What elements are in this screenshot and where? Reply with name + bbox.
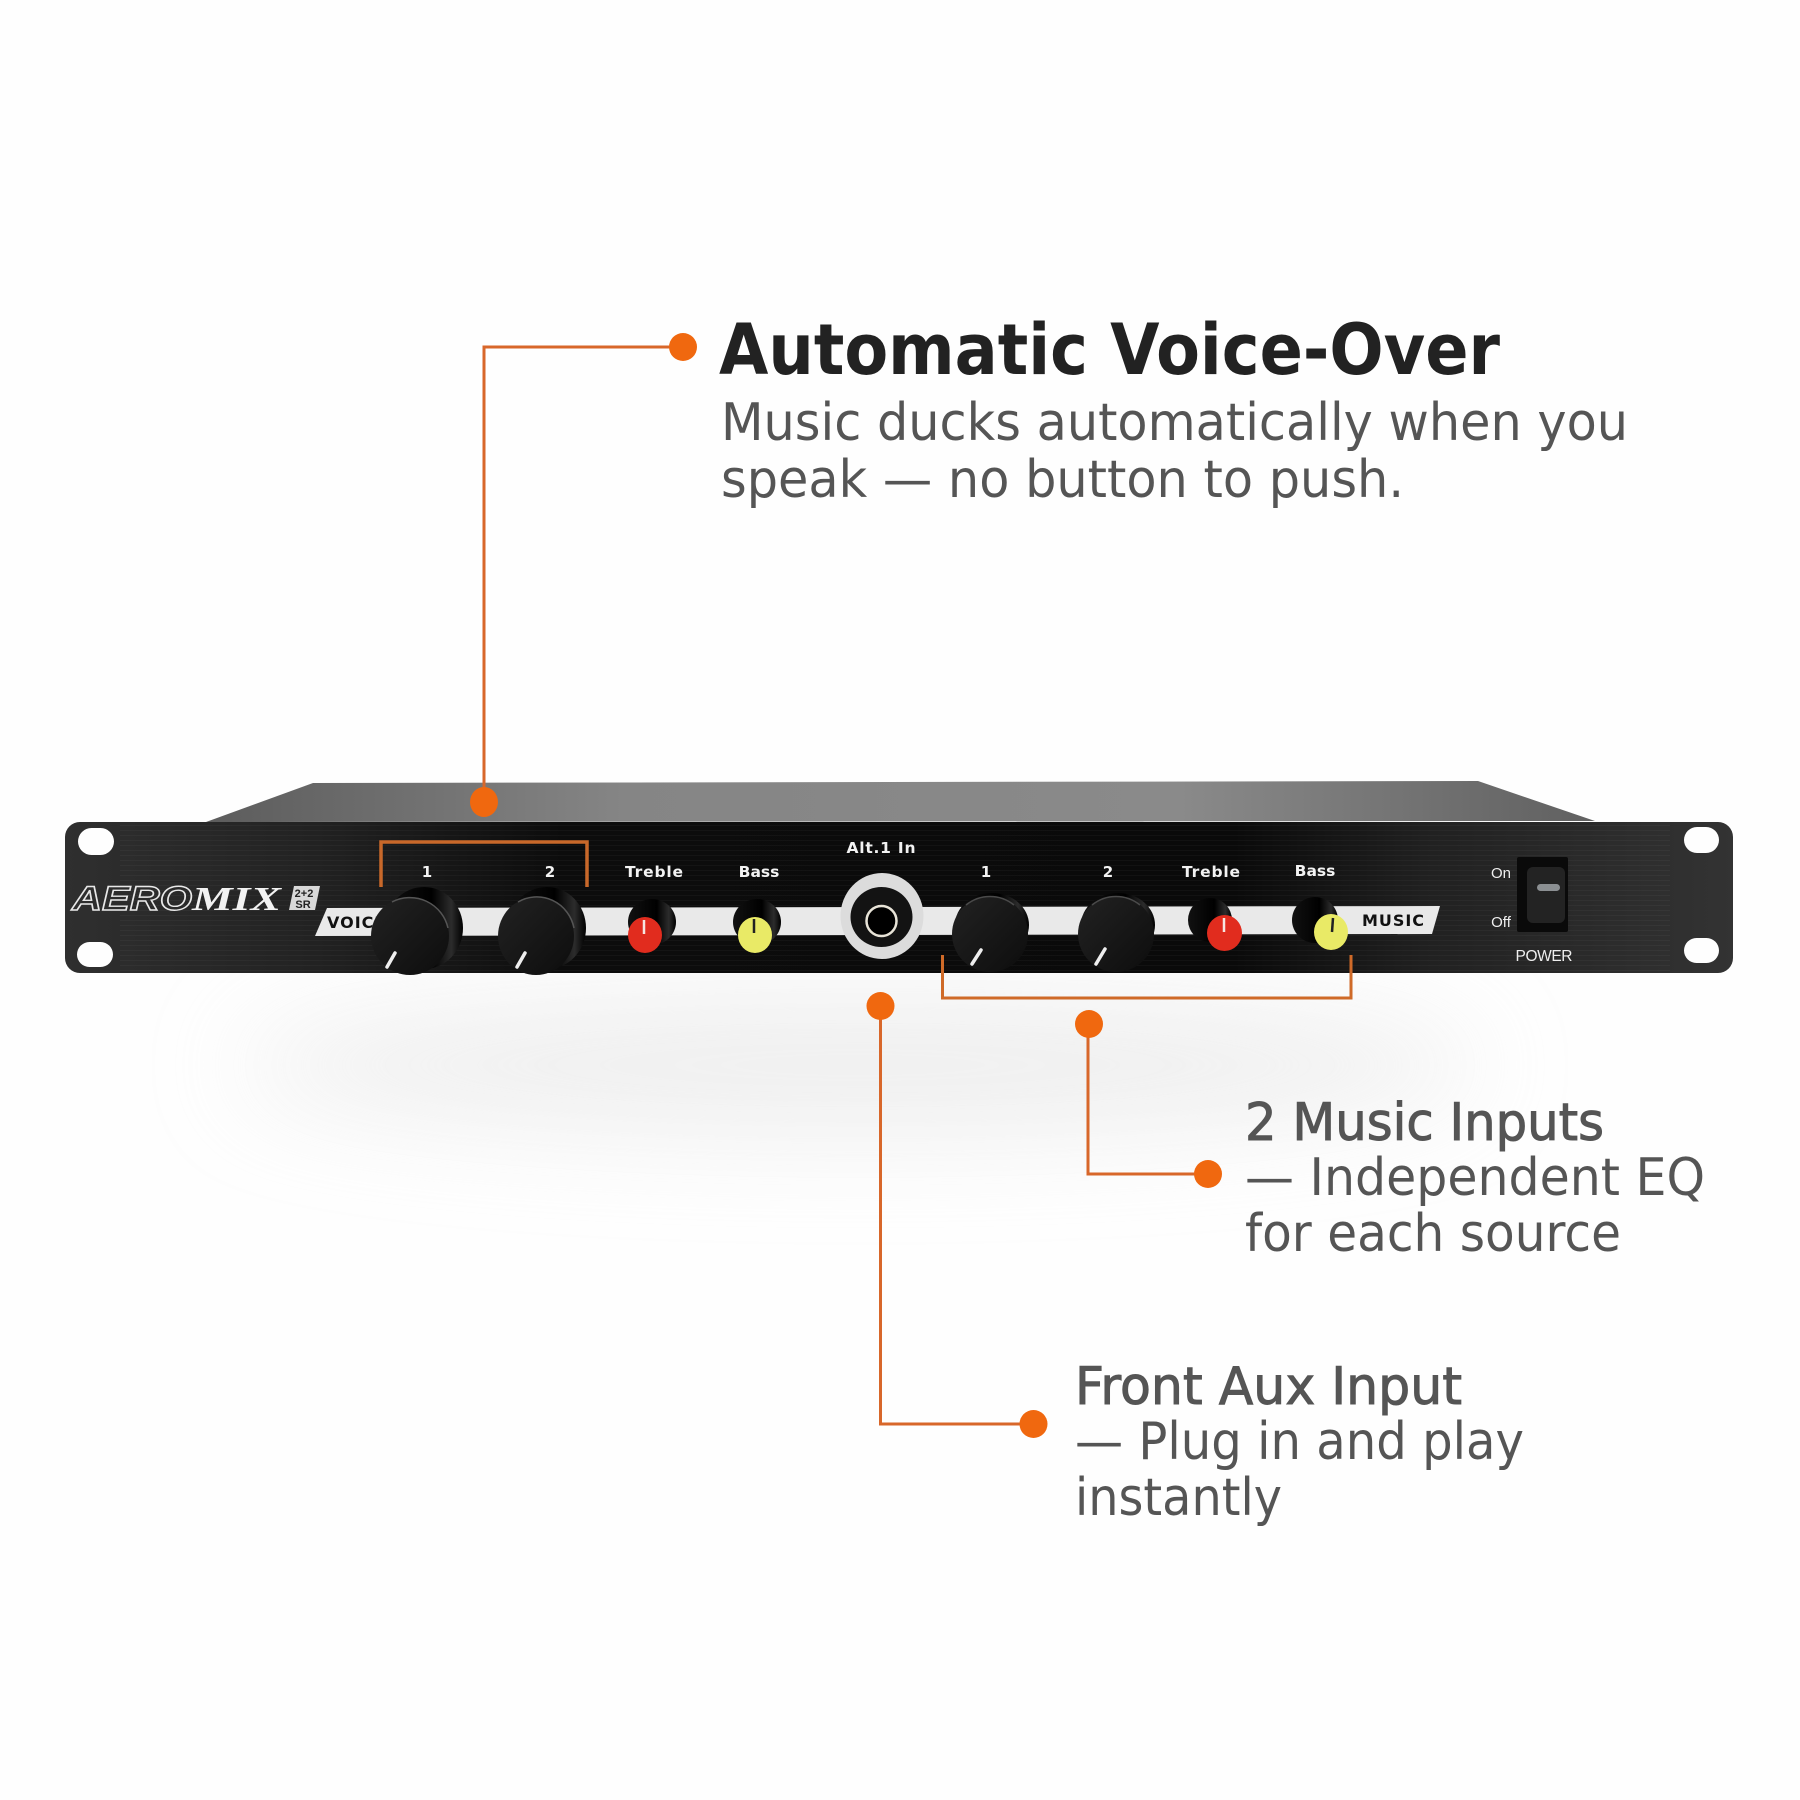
front panel	[65, 822, 1733, 973]
music knob 2	[1078, 893, 1155, 972]
power switch: On	[1491, 865, 1511, 882]
callout: 2 music inputs connector	[1075, 1010, 1222, 1188]
aux jack	[840, 873, 924, 959]
logo: 2+2	[295, 888, 313, 900]
treble knob right	[1188, 898, 1242, 951]
control labels	[422, 839, 1335, 881]
callout text: 2 Music Inputs	[1245, 1093, 1705, 1264]
power switch	[1491, 857, 1572, 965]
label: MUSIC: MUSIC	[1362, 911, 1424, 930]
power switch: POWER	[1516, 948, 1572, 965]
description	[721, 393, 1628, 510]
callout: automatic voice-over connector	[470, 333, 697, 817]
callout text: 2 Music Inputs: for each source	[1245, 1204, 1621, 1264]
bass knob left	[733, 899, 781, 953]
control labels: 1	[981, 863, 991, 881]
callout text: 2 Music Inputs: — Independent EQ	[1245, 1148, 1705, 1208]
control labels: Treble	[625, 863, 683, 881]
control labels: Bass	[739, 863, 779, 881]
control labels: Treble	[1182, 863, 1240, 881]
device top housing	[206, 781, 1595, 822]
logo: AERO	[71, 880, 192, 918]
description: speak — no button to push.	[721, 450, 1404, 510]
treble knob left	[628, 899, 676, 953]
callout text: 2 Music Inputs: 2 Music Inputs	[1245, 1093, 1604, 1153]
callout: front aux input connector	[866, 992, 1048, 1438]
music inputs bracket	[942, 955, 1351, 998]
power switch: Off	[1491, 914, 1512, 931]
music knob 1	[952, 893, 1029, 972]
control labels: Alt.1 In	[846, 839, 916, 857]
control labels: 2	[1103, 863, 1113, 881]
white label strip	[315, 906, 1440, 936]
control labels: 2	[545, 863, 555, 881]
logo	[71, 880, 320, 918]
label: VOICE: VOICE	[327, 913, 386, 932]
logo: SR	[295, 899, 311, 911]
callout text: Front Aux Input: Front Aux Input	[1075, 1357, 1462, 1417]
device shadow	[240, 995, 1480, 1135]
callout text: Front Aux Input	[1075, 1357, 1524, 1528]
voice knob 2	[498, 887, 586, 975]
voice knob 1	[371, 887, 463, 975]
callout text: Front Aux Input: instantly	[1075, 1468, 1282, 1528]
rack mixer device	[65, 781, 1733, 998]
voice inputs bracket	[381, 842, 587, 887]
bass knob right	[1292, 897, 1348, 950]
heading: Automatic Voice-Over	[719, 309, 1500, 391]
description: Music ducks automatically when you	[721, 393, 1628, 453]
callout text: Front Aux Input: — Plug in and play	[1075, 1412, 1524, 1472]
control labels: 1	[422, 863, 432, 881]
logo: MIX	[191, 881, 283, 918]
callout text: Automatic Voice-Over	[719, 309, 1628, 510]
control labels: Bass	[1295, 862, 1335, 880]
